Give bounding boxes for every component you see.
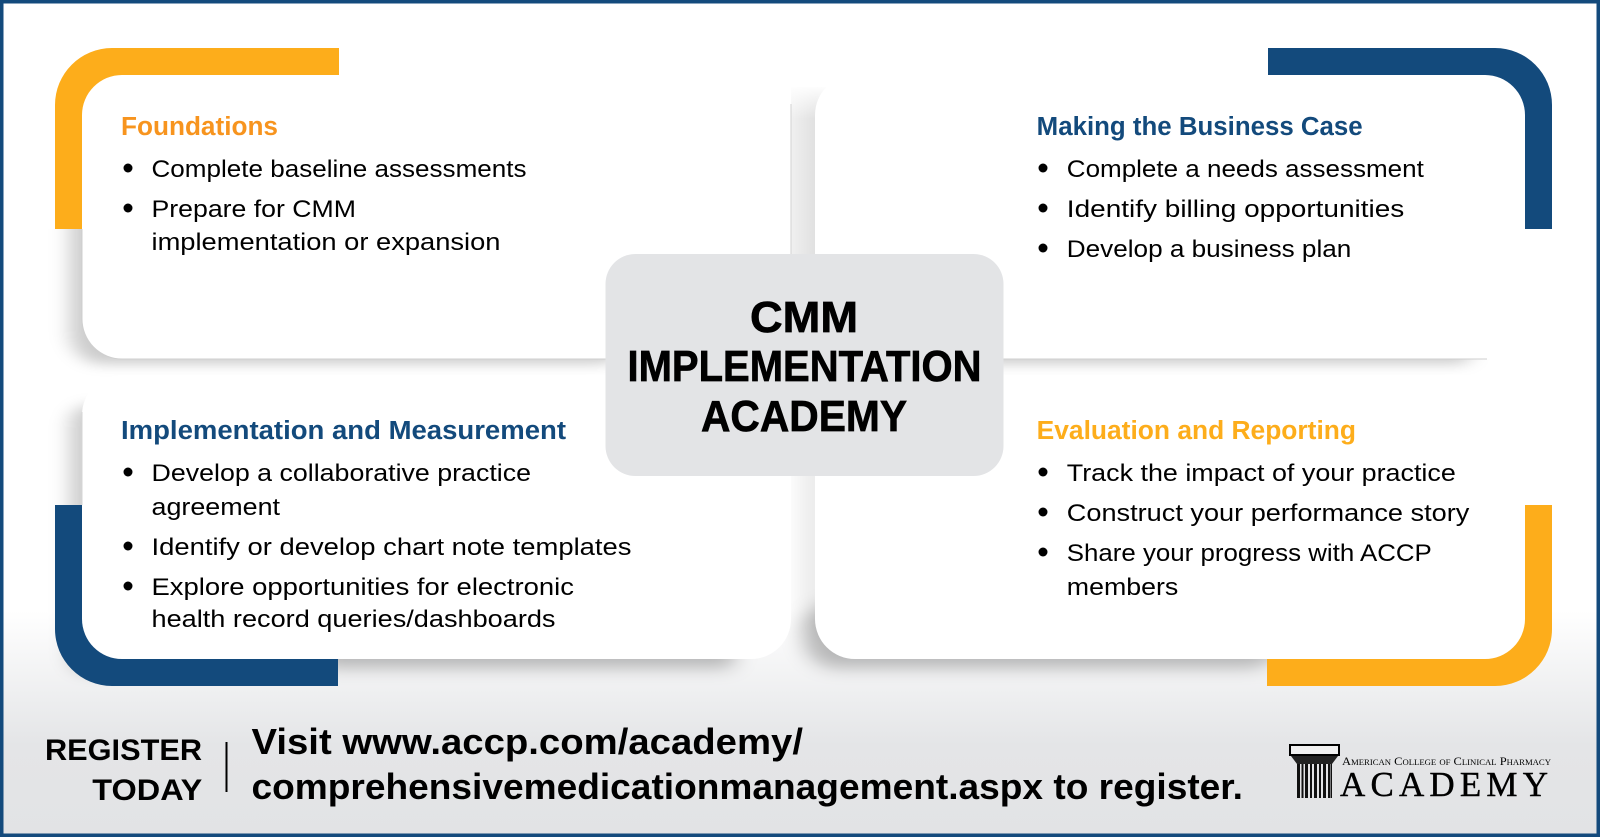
bracket: Evaluation and Reporting orange — [1267, 505, 1552, 686]
register today label: REGISTER — [45, 734, 202, 767]
logo: ACCP Academy: ACADEMY — [1340, 765, 1548, 804]
bullet list: Implementation and Measurement — [124, 460, 632, 633]
title: CMM Implementation Academy — [628, 293, 982, 441]
bullet list: Foundations — [124, 156, 526, 256]
bracket: Making the Business Case navy — [1268, 48, 1552, 229]
center title box — [606, 254, 1004, 476]
register url text: Visit www.accp.com/academy/ — [252, 721, 803, 762]
title: CMM Implementation Academy: IMPLEMENTATION — [628, 342, 982, 391]
bracket: Implementation and Measurement navy — [55, 505, 338, 686]
bullet list: Evaluation and Reporting: members — [1067, 574, 1178, 601]
register today label — [45, 734, 202, 807]
bullet list: Foundations: implementation or expansion — [152, 229, 500, 256]
heading: Making the Business Case: Making the Business Case — [1037, 113, 1363, 141]
bullet list: Implementation and Measurement: Develop a collaborative practice — [152, 460, 531, 487]
heading: Evaluation and Reporting: Evaluation and Reporting — [1037, 417, 1356, 445]
register url text — [252, 721, 1243, 807]
bullet list: Evaluation and Reporting: Share your progress with ACCP — [1067, 540, 1432, 567]
bullet list: Making the Business Case: Develop a business plan — [1067, 236, 1351, 263]
bullet list: Making the Business Case: Complete a needs assessment — [1067, 156, 1424, 183]
heading: Foundations: Foundations — [121, 113, 278, 141]
bullet list: Evaluation and Reporting — [1038, 460, 1470, 601]
bullet list: Making the Business Case — [1038, 156, 1424, 263]
panel: Foundations — [82, 75, 791, 359]
title: CMM Implementation Academy: CMM — [750, 293, 858, 342]
icon: column — [1290, 745, 1339, 798]
bullet list: Making the Business Case: Identify billing opportunities — [1067, 196, 1404, 223]
heading: Implementation and Measurement: Implementation and Measurement — [121, 417, 567, 445]
bullet list: Foundations: Prepare for CMM — [152, 196, 356, 223]
bullet list: Implementation and Measurement: health record queries/dashboards — [152, 606, 556, 633]
bullet list: Implementation and Measurement: agreement — [152, 494, 280, 521]
bullet list: Evaluation and Reporting: Track the impact of your practice — [1067, 460, 1456, 487]
bullet list: Evaluation and Reporting: Construct your performance story — [1067, 500, 1470, 527]
bullet list: Implementation and Measurement: Identify or develop chart note templates — [152, 534, 632, 561]
bracket: Foundations orange — [55, 48, 339, 229]
panel: Making the Business Case — [815, 75, 1525, 359]
panel: Implementation and Measurement — [82, 375, 791, 659]
title: CMM Implementation Academy: ACADEMY — [701, 392, 907, 441]
bullet list: Implementation and Measurement: Explore opportunities for electronic — [152, 574, 574, 601]
logo: ACCP Academy — [1290, 745, 1551, 804]
panel: Evaluation and Reporting — [815, 375, 1525, 659]
register today label: TODAY — [92, 774, 202, 807]
logo: ACCP Academy: American College of Clinical Pharmacy — [1342, 756, 1551, 768]
register url text: comprehensivemedicationmanagement.aspx to register. — [252, 766, 1243, 807]
bullet list: Foundations: Complete baseline assessments — [152, 156, 526, 183]
